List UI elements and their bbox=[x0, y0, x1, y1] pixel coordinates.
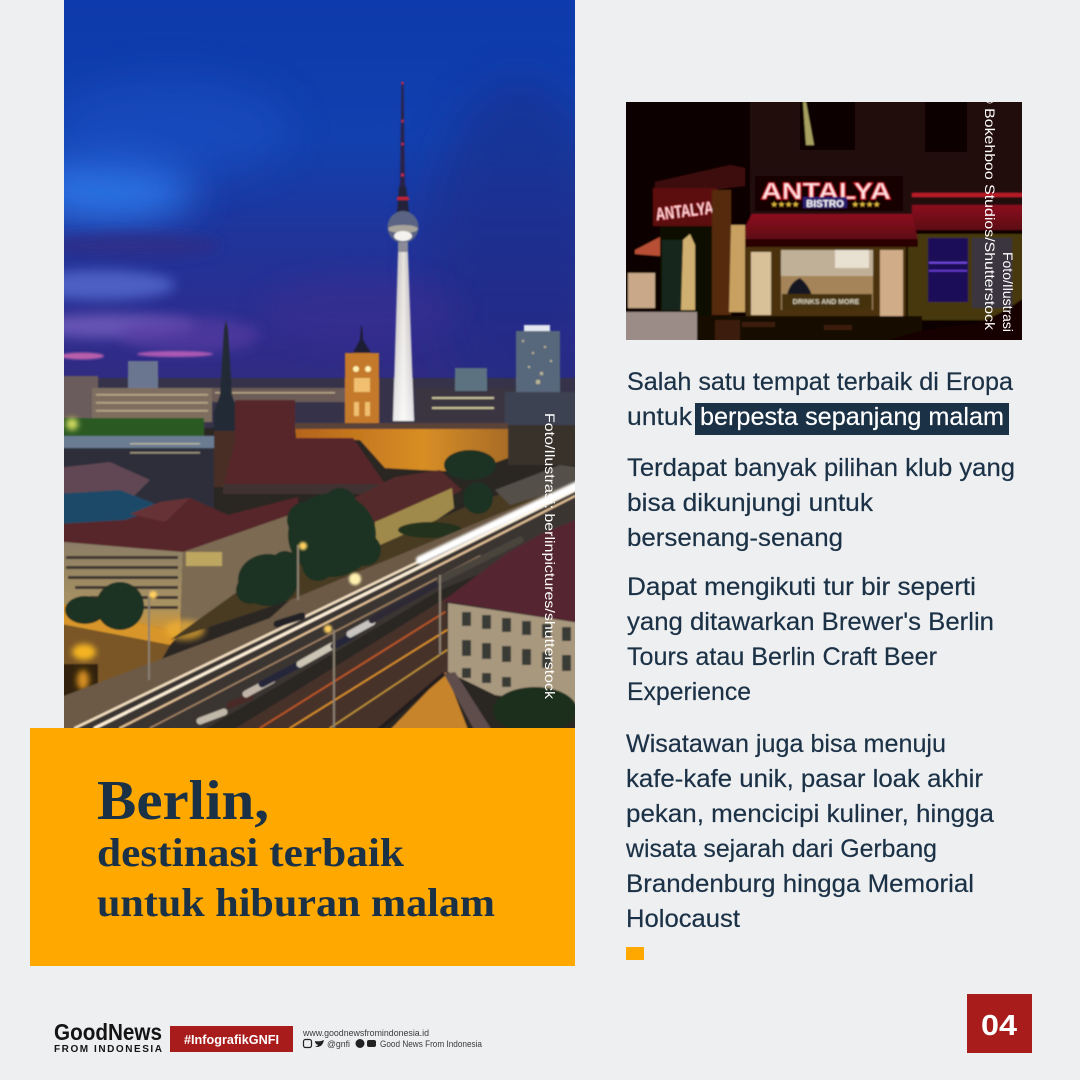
main sign: ANTALYA BISTRO bbox=[755, 176, 903, 211]
corner entrance bbox=[660, 226, 712, 321]
point 1: Salah satu tempat terbaik di Eropa bbox=[627, 368, 1013, 396]
website and social handles: www.goodnewsfromindonesia.id bbox=[302, 1028, 429, 1038]
church with spire bbox=[214, 320, 385, 494]
white fence bbox=[620, 312, 697, 352]
point 3: Experience bbox=[627, 678, 751, 706]
right foreground building bbox=[444, 520, 575, 706]
title panel bbox=[30, 728, 575, 966]
point 4: Holocaust bbox=[626, 905, 740, 933]
website and social handles: Good News From Indonesia bbox=[380, 1039, 482, 1049]
hashtag tag bbox=[170, 1026, 293, 1052]
distant city band bbox=[40, 361, 600, 465]
trees bbox=[65, 450, 496, 630]
yellow wall, right bbox=[908, 234, 1038, 320]
photo: Antalya Bistro at night bbox=[626, 102, 1022, 340]
point 4: Brandenburg hingga Memorial bbox=[626, 870, 974, 898]
main road surface bbox=[72, 492, 575, 728]
poster bbox=[628, 273, 655, 308]
main sign: ANTALYA BISTRO: ★★★★ bbox=[771, 200, 799, 209]
terrace with tables bbox=[697, 316, 922, 352]
blue-grey mid-ground block bbox=[64, 434, 216, 524]
dim orange ground between road and buildings bbox=[170, 494, 540, 640]
sky with clouds bbox=[64, 0, 575, 379]
body text block bbox=[625, 368, 1015, 933]
photo credit, city photo: Foto/Ilustrasi: berlinpictures/shutterstock bbox=[542, 413, 558, 700]
menu strip bbox=[712, 190, 731, 315]
Fernsehturm tower bbox=[388, 82, 418, 421]
left waterside bbox=[64, 624, 170, 696]
page number bbox=[967, 994, 1032, 1053]
tree in the lower right corner bbox=[494, 686, 575, 728]
point 2: bisa dikunjungi untuk bbox=[627, 489, 874, 517]
footer bbox=[54, 994, 1032, 1055]
right awning bbox=[912, 205, 1037, 230]
Park Inn tower bbox=[516, 325, 560, 392]
dark building wall bbox=[626, 102, 1022, 332]
sunlit gold building bbox=[295, 423, 508, 472]
main sign: ANTALYA BISTRO: ANTALYA bbox=[761, 178, 891, 204]
main sign: ANTALYA BISTRO: BISTRO bbox=[806, 199, 844, 210]
photo: Berlin skyline at dusk bbox=[64, 0, 575, 728]
logo: GoodNews From Indonesia: GoodNews bbox=[54, 1019, 162, 1045]
subtitle line 1: destinasi terbaik bbox=[97, 830, 405, 875]
ground base bbox=[64, 427, 575, 728]
arched ramp bbox=[378, 672, 492, 728]
Red Town Hall clock tower bbox=[345, 326, 379, 423]
light trails on the road bbox=[75, 484, 580, 728]
photo credits, bistro photo: © Bokehboo Studios/Shutterstock bbox=[982, 92, 998, 331]
side awning bbox=[635, 237, 660, 256]
parked cars bbox=[200, 540, 520, 721]
subtitle line 2: untuk hiburan malam bbox=[97, 880, 495, 925]
photo credits, bistro photo: Foto/Ilustrasi bbox=[1000, 252, 1016, 332]
purple window bbox=[928, 238, 1012, 308]
parking lot, upper right bbox=[495, 464, 575, 506]
point 3: yang ditawarkan Brewer's Berlin bbox=[627, 608, 994, 636]
ground under ramp bbox=[390, 672, 468, 728]
shop front windows bbox=[746, 247, 906, 317]
point 4: wisata sejarah dari Gerbang bbox=[625, 835, 937, 863]
riverside houses bbox=[354, 470, 462, 546]
page number: 04 bbox=[981, 1010, 1017, 1042]
photo credits, bistro photo bbox=[982, 92, 1016, 332]
lower road bbox=[236, 598, 448, 728]
sidewalk bbox=[64, 490, 558, 728]
point 4: pekan, mencicipi kuliner, hingga bbox=[626, 800, 994, 828]
shop front windows: DRINKS AND MORE bbox=[793, 299, 860, 306]
point 3 bbox=[627, 573, 994, 706]
point 1 bbox=[627, 368, 1013, 435]
point 3: Dapat mengikuti tur bir seperti bbox=[627, 573, 976, 601]
menu window bbox=[729, 225, 745, 312]
point 2: Terdapat banyak pilihan klub yang bbox=[627, 454, 1015, 482]
street lamps bbox=[149, 542, 440, 728]
corner sign: ANTALYA bbox=[655, 198, 715, 224]
logo: GoodNews From Indonesia bbox=[54, 1019, 162, 1055]
parked car bbox=[890, 290, 1035, 350]
point 4: kafe-kafe unik, pasar loak akhir bbox=[626, 765, 983, 793]
orange end marker bbox=[626, 947, 644, 960]
red neon strip, right bbox=[912, 193, 1037, 197]
title: Berlin: Berlin, bbox=[97, 770, 269, 832]
point 2 bbox=[627, 454, 1015, 552]
point 1: berpesta sepanjang malam bbox=[700, 403, 1004, 431]
corner sign bbox=[653, 165, 745, 226]
website and social handles bbox=[302, 1028, 482, 1049]
point 4: Wisatawan juga bisa menuju bbox=[626, 730, 946, 758]
corner building roof and walls bbox=[40, 497, 298, 645]
main awning bbox=[738, 214, 918, 240]
point 4 bbox=[625, 730, 994, 933]
hashtag tag: #InfografikGNFI bbox=[184, 1033, 279, 1047]
point 2: bersenang-senang bbox=[627, 524, 843, 552]
point 1: untuk bbox=[627, 403, 693, 431]
main sign: ANTALYA BISTRO: ★★★★ bbox=[852, 200, 880, 209]
lower scene, softened bbox=[64, 80, 575, 728]
website and social handles: @gnfi bbox=[327, 1039, 350, 1049]
logo: GoodNews From Indonesia: FROM INDONESIA bbox=[54, 1044, 162, 1055]
point 3: Tours atau Berlin Craft Beer bbox=[627, 643, 937, 671]
